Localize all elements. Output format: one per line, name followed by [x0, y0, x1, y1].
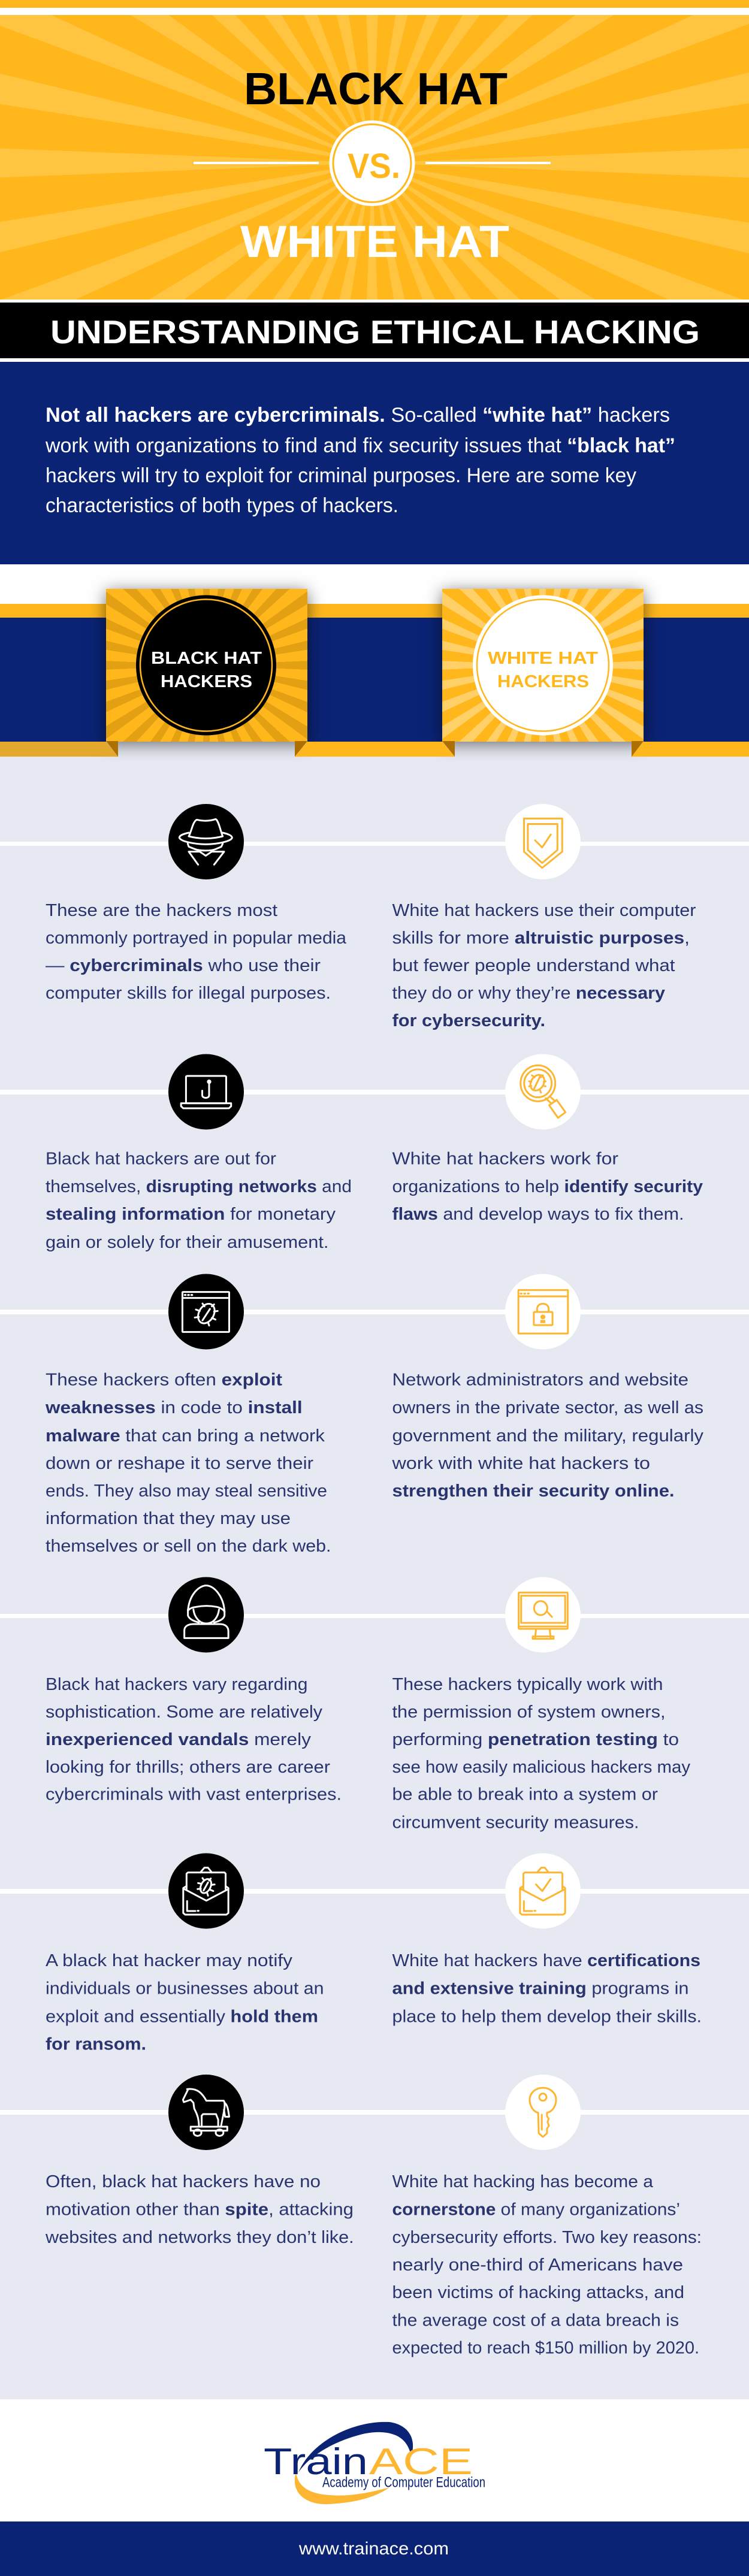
text: black hat 1	[46, 901, 347, 1003]
text: black hat 4: cybercriminals with vast enterprises.	[46, 1785, 342, 1804]
text: white hat 6: cybersecurity efforts. Two key reasons:	[392, 2228, 702, 2247]
logo: TrainACE	[264, 2422, 485, 2504]
text: black hat 6: websites and networks they don’t like.	[45, 2228, 354, 2247]
row 5	[46, 1854, 702, 2054]
intro text: work with organizations to find and fix security issues that “black hat”	[45, 434, 675, 457]
icon: browser window with bug	[168, 1274, 244, 1349]
icon: trojan horse	[168, 2075, 244, 2150]
icon: shield with check	[505, 804, 581, 879]
text: black hat 3: malware that can bring a network	[46, 1426, 325, 1446]
logo: TrainACE: ACE	[369, 2441, 473, 2483]
divider lines and vs. badge: VS.	[348, 147, 400, 186]
text: black hat 2	[46, 1149, 352, 1252]
row 3	[45, 1274, 704, 1556]
footer url: www.trainace.com	[298, 2539, 449, 2559]
panel: white hat badge background	[442, 589, 644, 742]
heading: black hat: BLACK HAT	[244, 64, 508, 114]
text: black hat 5	[46, 1951, 324, 2054]
text: black hat 1: — cybercriminals who use their	[46, 956, 321, 975]
text: white hat 5: White hat hackers have certifications	[392, 1951, 700, 1970]
text: black hat 4: sophistication. Some are relatively	[46, 1703, 323, 1722]
text: white hat 6: the average cost of a data breach is	[392, 2311, 679, 2330]
text: black hat 6	[45, 2172, 354, 2247]
title	[194, 64, 551, 267]
text: white hat 2	[392, 1149, 703, 1224]
text: black hat 3: ends. They also may steal sensitive	[46, 1481, 327, 1501]
icon: spy with hat	[168, 804, 244, 879]
text: white hat 2: organizations to help identify security	[392, 1177, 703, 1196]
text: white hat 4	[392, 1675, 690, 1832]
text: white hat 3: Network administrators and website	[392, 1371, 688, 1390]
text: black hat 3	[45, 1371, 331, 1556]
text: black hat 2: themselves, disrupting networks and	[46, 1177, 352, 1196]
text: black hat 5: individuals or businesses about an	[46, 1979, 324, 1998]
text: white hat 3: government and the military, regularly	[392, 1426, 704, 1446]
text: white hat 6: nearly one-third of Americans have	[392, 2255, 683, 2275]
text: black hat 5: exploit and essentially hold them	[46, 2007, 318, 2026]
text: black hat 5: for ransom.	[46, 2034, 146, 2054]
text: black hat 2: Black hat hackers are out for	[46, 1149, 276, 1168]
text: black hat 3: themselves or sell on the dark web.	[46, 1537, 331, 1556]
badge: white hat hackers: WHITE HAT	[488, 649, 598, 668]
row 1	[46, 804, 696, 1030]
text: white hat 6: cornerstone of many organizations’	[392, 2200, 680, 2219]
panel: intro blue background	[0, 362, 749, 564]
panel: header sunburst background	[0, 15, 749, 300]
text: white hat 4: see how easily malicious hackers may	[392, 1758, 690, 1777]
icon: key	[505, 2075, 581, 2150]
text: black hat 5: A black hat hacker may notify	[46, 1951, 293, 1970]
icon: envelope with check	[505, 1854, 581, 1929]
subtitle: UNDERSTANDING ETHICAL HACKING	[50, 313, 700, 350]
icon: hooded hacker	[168, 1577, 244, 1652]
text: black hat 3: down or reshape it to serve their	[46, 1454, 313, 1473]
heading: white hat: WHITE HAT	[240, 216, 509, 267]
row 4	[46, 1577, 690, 1832]
text: white hat 4: These hackers typically work with	[392, 1675, 663, 1694]
text: white hat 1: for cybersecurity.	[392, 1011, 545, 1030]
text: black hat 1: commonly portrayed in popular media	[46, 929, 347, 948]
text: white hat 5	[392, 1951, 702, 2026]
text: white hat 3: work with white hat hackers to	[391, 1454, 650, 1473]
badge: black hat hackers	[136, 595, 276, 736]
badge: black hat hackers: BLACK HAT	[151, 649, 262, 668]
row 2	[46, 1054, 703, 1252]
intro text: Not all hackers are cybercriminals. So-called “white hat” hackers	[46, 404, 670, 427]
text: white hat 1: but fewer people understand what	[392, 956, 675, 975]
intro text: characteristics of both types of hackers.	[46, 494, 398, 517]
text: black hat 4	[46, 1675, 342, 1804]
text: black hat 4: inexperienced vandals merely	[46, 1730, 312, 1749]
text: white hat 6: expected to reach $150 million by 2020.	[392, 2339, 699, 2358]
text: white hat 3	[391, 1371, 704, 1501]
text: white hat 4: circumvent security measures.	[392, 1813, 639, 1832]
text: black hat 3: information that they may use	[46, 1509, 291, 1528]
badge: white hat hackers	[473, 595, 613, 736]
text: white hat 3: owners in the private sector, as well as	[392, 1398, 703, 1417]
text: white hat 1: skills for more altruistic purposes ,	[392, 929, 690, 948]
intro text: hackers will try to exploit for criminal purposes. Here are some key	[46, 464, 636, 487]
text: white hat 5: place to help them develop their skills.	[392, 2007, 702, 2026]
text: black hat 4: looking for thrills; others are career	[46, 1758, 330, 1777]
panel: black hat badge background	[106, 589, 307, 742]
logo: TrainACE: Train	[264, 2441, 368, 2483]
text: white hat 4: performing penetration testing to	[392, 1730, 679, 1749]
text: black hat 3: These hackers often exploit	[46, 1371, 282, 1390]
icon: monitor with magnifier	[505, 1577, 581, 1652]
icon: magnifier with bug	[505, 1054, 581, 1130]
text: black hat 6: motivation other than spite, attacking	[46, 2200, 354, 2219]
text: white hat 3: strengthen their security online.	[392, 1481, 675, 1501]
divider lines and vs. badge	[194, 120, 551, 206]
text: white hat 2: flaws and develop ways to fix them.	[392, 1205, 684, 1224]
text: black hat 6: Often, black hat hackers have no	[46, 2172, 321, 2191]
text: white hat 6	[392, 2172, 702, 2358]
text: black hat 2: stealing information for monetary	[46, 1205, 336, 1224]
logo: TrainACE: Academy of Computer Education	[322, 2474, 485, 2491]
text: white hat 4: the permission of system owners,	[392, 1703, 665, 1722]
top gold stripe	[0, 0, 749, 8]
text: white hat 1: White hat hackers use their computer	[392, 901, 696, 920]
text: black hat 1: These are the hackers most	[46, 901, 277, 920]
text: white hat 6: White hat hacking has become a	[392, 2172, 654, 2191]
text: white hat 1	[392, 901, 696, 1030]
icon: laptop with phishing hook	[168, 1054, 244, 1130]
badge: white hat hackers: HACKERS	[497, 672, 589, 691]
intro text	[45, 404, 675, 517]
panel: subtitle black bar	[0, 303, 749, 358]
text: black hat 1: computer skills for illegal purposes.	[46, 984, 331, 1003]
text: white hat 4: be able to break into a system or	[392, 1785, 658, 1804]
text: white hat 5: and extensive training programs in	[392, 1979, 689, 1998]
text: white hat 2: White hat hackers work for	[392, 1149, 618, 1168]
icon: browser window with padlock	[505, 1274, 581, 1349]
row 6	[45, 2075, 702, 2358]
text: white hat 1: they do or why they’re necessary	[392, 984, 665, 1003]
text: black hat 3: weaknesses in code to install	[45, 1398, 303, 1417]
badge: black hat hackers: HACKERS	[161, 672, 252, 691]
text: white hat 6: been victims of hacking attacks, and	[392, 2283, 684, 2302]
ribbon folds under badges	[0, 741, 749, 757]
icon: envelope with bug	[168, 1854, 244, 1929]
text: black hat 4: Black hat hackers vary regarding	[46, 1675, 307, 1694]
text: black hat 2: gain or solely for their amusement.	[46, 1233, 328, 1252]
